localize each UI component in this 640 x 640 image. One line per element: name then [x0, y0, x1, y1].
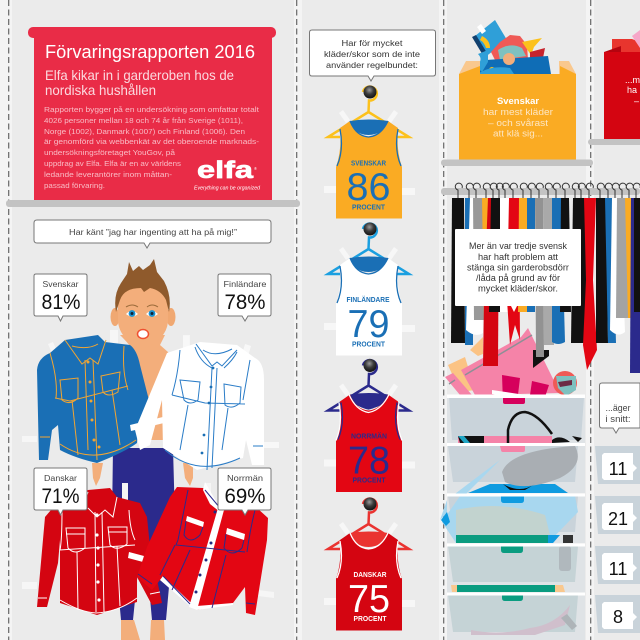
jersey: Svenskar 86: SVENSKAR	[351, 160, 386, 168]
shirt: red, Norway	[137, 482, 274, 615]
hands and feet	[92, 463, 193, 640]
callout: owns on average	[600, 383, 640, 433]
callout: nothing to wear: Har känt ”jag har ingenting att ha på mig!”	[69, 227, 237, 237]
callout: too many clothes unused: Har för mycket	[342, 38, 403, 48]
jersey: Danskar 75: 75	[348, 578, 390, 621]
jersey: Finländare 79	[324, 222, 415, 356]
callout: Svenskar 81%: Svenskar	[42, 279, 79, 289]
clothes rail with garments	[441, 183, 640, 403]
callout: Danskar 71%	[34, 468, 87, 515]
box: red, next country: ...m	[625, 75, 640, 85]
callout: owns on average: ...äger	[606, 403, 631, 413]
tabs and body	[110, 330, 190, 360]
body text: ledande leverantörer inom måttan-	[44, 170, 173, 179]
shirt: white, Finland	[130, 336, 279, 470]
jersey: Svenskar 86: 86	[346, 166, 390, 209]
jersey: Norrmän 78: PROCENT	[352, 478, 386, 484]
box: yellow, Svenskar: har mest kläder	[483, 107, 553, 117]
subtitle: nordiska hushållen	[45, 82, 156, 98]
body text: passad förvaring.	[44, 181, 105, 190]
subtitle	[45, 67, 234, 98]
drawer 3	[441, 496, 585, 543]
count: 8: 8	[613, 607, 623, 627]
body text	[44, 105, 260, 190]
callout: Danskar 71%: 71%	[42, 485, 80, 508]
callout: too many clothes unused: använder regelbundet:	[326, 60, 418, 70]
callout: problem closing wardrobe	[455, 229, 581, 312]
box: yellow, Svenskar	[459, 20, 576, 160]
garments	[451, 198, 640, 373]
eyes	[126, 305, 158, 317]
callout: owns on average: i snitt:	[606, 414, 630, 424]
jersey: Svenskar 86	[324, 86, 415, 218]
drawer 4	[447, 546, 585, 593]
jersey: Norrmän 78: 78	[348, 440, 390, 482]
body text: Rapporten bygger på en undersökning som omfattar totalt	[44, 105, 260, 114]
box: yellow, Svenskar: – och svårast	[488, 118, 549, 128]
callout: too many clothes unused	[310, 30, 436, 81]
pile of clothes	[445, 328, 577, 394]
callout: problem closing wardrobe: har haft problem att	[478, 252, 559, 262]
box: red, next country: ha	[627, 85, 637, 95]
jersey: Danskar 75: PROCENT	[354, 616, 387, 623]
callout: Norrmän 69%	[218, 468, 271, 515]
drawer 1	[447, 396, 585, 452]
subtitle: Elfa kikar in i garderoben hos de	[45, 67, 234, 83]
callout: Norrmän 69%: Norrmän	[227, 473, 263, 483]
figure: person	[92, 259, 193, 640]
callout: Finländare 78%: 78%	[224, 291, 266, 314]
count: 8	[602, 602, 637, 629]
body text: 4026 personer mellan 18 och 74 år från Sverige (1011),	[44, 116, 243, 125]
body text: Norge (1002), Danmark (1007) och Finland (1006). Den	[44, 127, 245, 136]
callout: Svenskar 81%	[34, 274, 87, 321]
jersey: Finländare 79: FINLÄNDARE	[346, 296, 390, 304]
box: yellow, Svenskar: att klä sig...	[493, 128, 543, 138]
count: 11: 11	[609, 459, 627, 479]
drawer 2	[440, 446, 585, 520]
hanger hooks	[455, 183, 640, 198]
count: 21	[602, 503, 637, 530]
box: red, next country	[604, 30, 640, 139]
hair	[115, 259, 170, 312]
callout: Svenskar 81%: 81%	[42, 291, 80, 314]
callout: Finländare 78%	[218, 274, 271, 321]
icon: clothes in box	[472, 20, 551, 74]
jersey: Danskar 75: DANSKAR	[354, 572, 386, 579]
callout: too many clothes unused: kläder/skor som de inte	[324, 49, 420, 59]
body text: är genomförd via webbenkät av det oberoende marknads-	[44, 137, 260, 146]
logo: elfa	[194, 157, 261, 192]
count: 11: 11	[609, 559, 627, 579]
logo: elfa: ®	[254, 166, 257, 171]
callout: problem closing wardrobe: /låda på grund av för	[476, 273, 560, 283]
box: red, next country: –	[634, 96, 639, 106]
callout: nothing to wear	[34, 220, 271, 248]
callout: problem closing wardrobe: mycket kläder/skor.	[478, 284, 558, 294]
box: yellow, Svenskar: Svenskar	[497, 96, 540, 106]
drawer 5	[447, 595, 585, 640]
callout: problem closing wardrobe: stänga sin garderobsdörr	[467, 262, 569, 272]
jersey: Norrmän 78: NORRMÄN	[351, 432, 387, 440]
jersey: Finländare 79: PROCENT	[352, 342, 386, 348]
logo: elfa: Everything can be organized	[194, 186, 261, 192]
title: Förvaringsrapporten 2016	[45, 41, 255, 62]
panel: report intro	[28, 27, 276, 201]
count: 11	[602, 553, 637, 580]
jersey: Svenskar 86: PROCENT	[352, 204, 386, 212]
drawers with stored clothes	[440, 394, 585, 640]
logo: elfa: elfa	[197, 157, 254, 184]
rail	[441, 188, 640, 195]
mouth	[138, 330, 148, 338]
shirt: red, Denmark	[22, 485, 162, 615]
count: 11	[602, 453, 637, 480]
callout: problem closing wardrobe: Mer än var tredje svensk	[469, 241, 568, 251]
body text: uppdrag av Elfa. Elfa är en av världens	[44, 159, 181, 168]
jersey: Norrmän 78	[324, 359, 415, 492]
jersey: Finländare 79: 79	[348, 303, 390, 346]
shirt: blue, Sweden	[22, 335, 152, 463]
callout: Danskar 71%: Danskar	[44, 473, 77, 483]
count: 21: 21	[608, 509, 628, 529]
callout: Norrmän 69%: 69%	[224, 485, 266, 508]
jersey: Danskar 75	[324, 498, 415, 630]
table: item counts	[595, 446, 640, 633]
body text: undersökningsföretaget YouGov, på	[44, 148, 176, 157]
callout: Finländare 78%: Finländare	[224, 279, 267, 289]
